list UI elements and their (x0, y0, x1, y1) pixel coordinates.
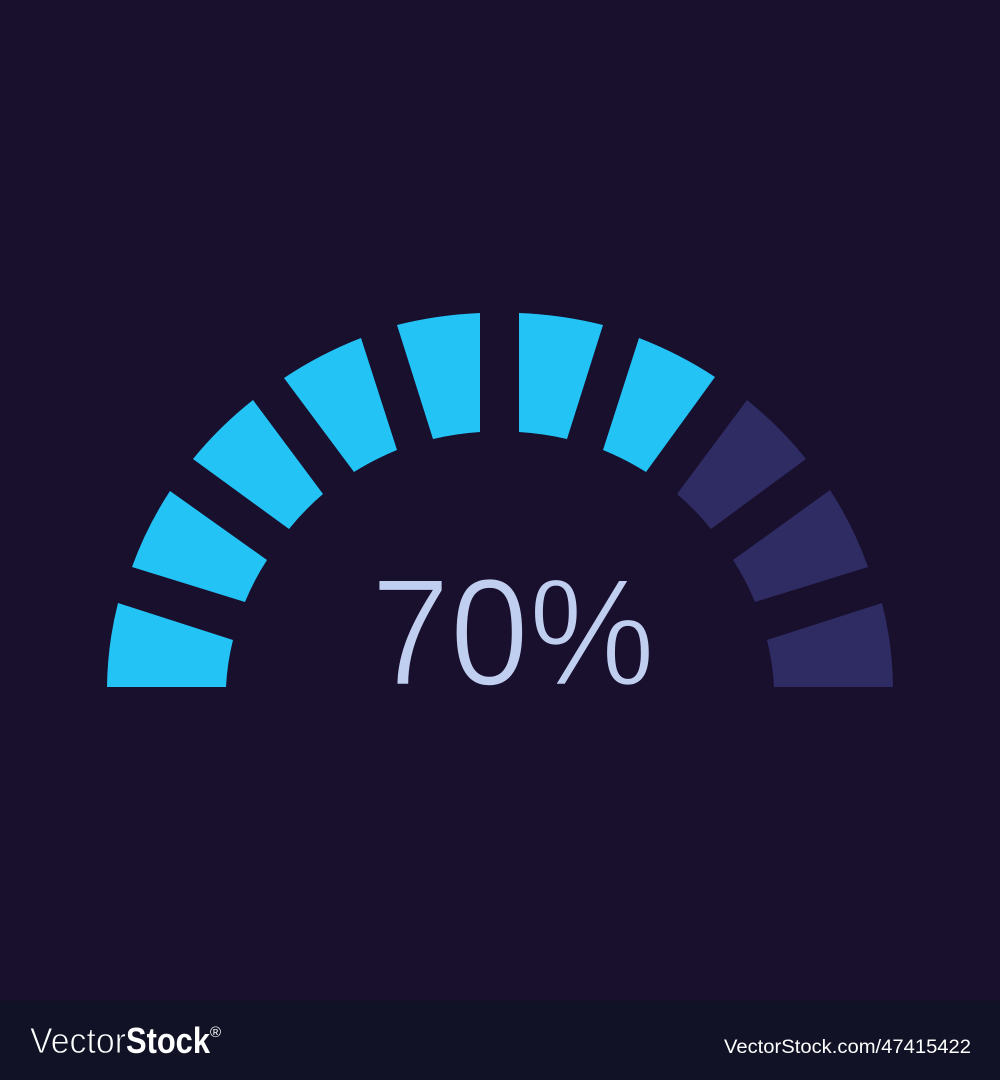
percentage value: 70% (371, 547, 655, 718)
unfilled segments: 30% (677, 400, 893, 687)
footer logo: Vector (30, 1020, 126, 1061)
footer logo: Stock (126, 1020, 211, 1061)
registered mark: ® (210, 1024, 221, 1041)
footer logo (30, 1020, 211, 1061)
footer image id: VectorStock.com/47415422 (724, 1037, 971, 1058)
footer bar (0, 1001, 1000, 1080)
filled segments: 70% (107, 313, 715, 687)
semicircular gauge chart (107, 313, 893, 687)
